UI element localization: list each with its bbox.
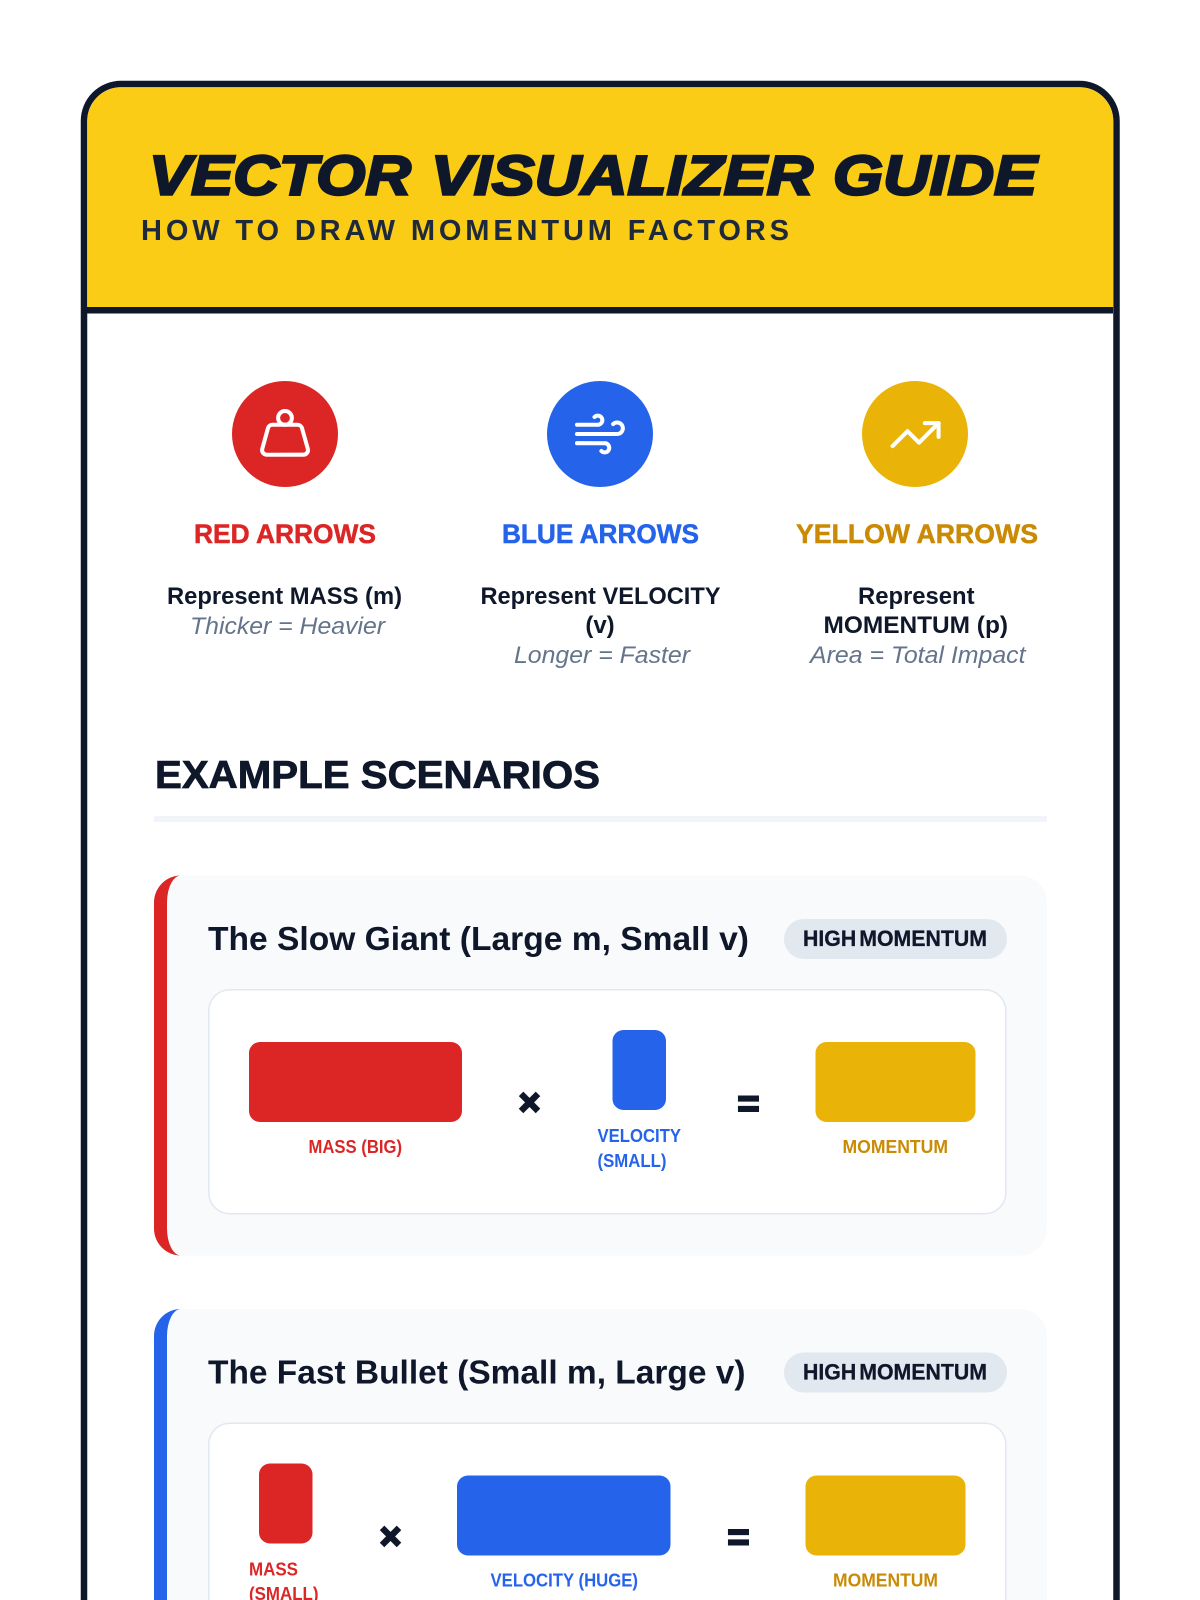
title: VECTOR — [149, 144, 412, 206]
header banner — [87, 87, 1113, 314]
subtitle: HOW TO DRAW MOMENTUM FACTORS — [141, 215, 789, 247]
momentum block — [816, 1042, 976, 1157]
note: thicker equals heavier: Thicker = Heavier — [190, 613, 386, 640]
panel: the fast bullet — [154, 1309, 1047, 1600]
velocity block — [598, 1030, 681, 1171]
velocity block: (SMALL) — [598, 1151, 666, 1171]
badge: high momentum — [784, 1352, 1007, 1392]
heading: yellow arrows: YELLOW ARROWS — [796, 519, 1038, 549]
mass block — [249, 1464, 318, 1600]
momentum block — [806, 1476, 966, 1590]
badge: high momentum: HIGH MOMENTUM — [803, 1360, 987, 1384]
badge: high momentum: HIGH MOMENTUM — [803, 926, 987, 951]
panel: the slow giant — [154, 876, 1047, 1256]
mass block: MASS — [249, 1560, 298, 1580]
multiply sign: × — [519, 1082, 540, 1123]
momentum block: MOMENTUM — [833, 1570, 938, 1590]
note: longer equals faster: Longer = Faster — [514, 642, 691, 669]
momentum block: MOMENTUM — [842, 1137, 948, 1157]
badge: high momentum — [784, 919, 1007, 959]
velocity block: VELOCITY — [598, 1126, 681, 1146]
icon: wind — [547, 381, 653, 487]
velocity block: VELOCITY (HUGE) — [490, 1570, 638, 1590]
description: momentum: Represent — [858, 583, 975, 610]
equation box — [209, 1423, 1006, 1600]
icon: trending up — [862, 381, 968, 487]
section heading — [154, 754, 1047, 822]
description: momentum — [824, 583, 1008, 639]
legend column: yellow arrows — [796, 381, 1038, 669]
scenario title: The Slow Giant (Large m, Small v) — [208, 920, 749, 957]
heading: red arrows: RED ARROWS — [194, 519, 376, 549]
mass block: MASS (BIG) — [308, 1137, 402, 1157]
description: velocity: (v) — [585, 612, 615, 639]
multiply sign: × — [380, 1515, 401, 1556]
scenario title: The Fast Bullet (Small m, Large v) — [208, 1354, 746, 1390]
mass block — [249, 1042, 462, 1157]
section heading: EXAMPLE SCENARIOS — [155, 754, 600, 797]
legend column: red arrows — [167, 381, 402, 640]
title — [149, 144, 1039, 206]
description: momentum: MOMENTUM (p) — [824, 612, 1008, 639]
description: mass: Represent MASS (m) — [167, 583, 402, 610]
icon: weight — [232, 381, 338, 487]
title: VISUALIZER — [431, 144, 814, 206]
title: GUIDE — [833, 144, 1039, 206]
equation box — [209, 990, 1006, 1214]
equals sign: = — [727, 1517, 750, 1559]
heading: blue arrows: BLUE ARROWS — [502, 519, 699, 549]
legend column: blue arrows — [480, 381, 720, 669]
description: velocity — [480, 583, 720, 639]
note: area equals total impact: Area = Total Impact — [808, 642, 1027, 669]
velocity block — [457, 1476, 670, 1590]
equals sign: = — [737, 1084, 760, 1126]
description: velocity: Represent VELOCITY — [480, 583, 720, 610]
